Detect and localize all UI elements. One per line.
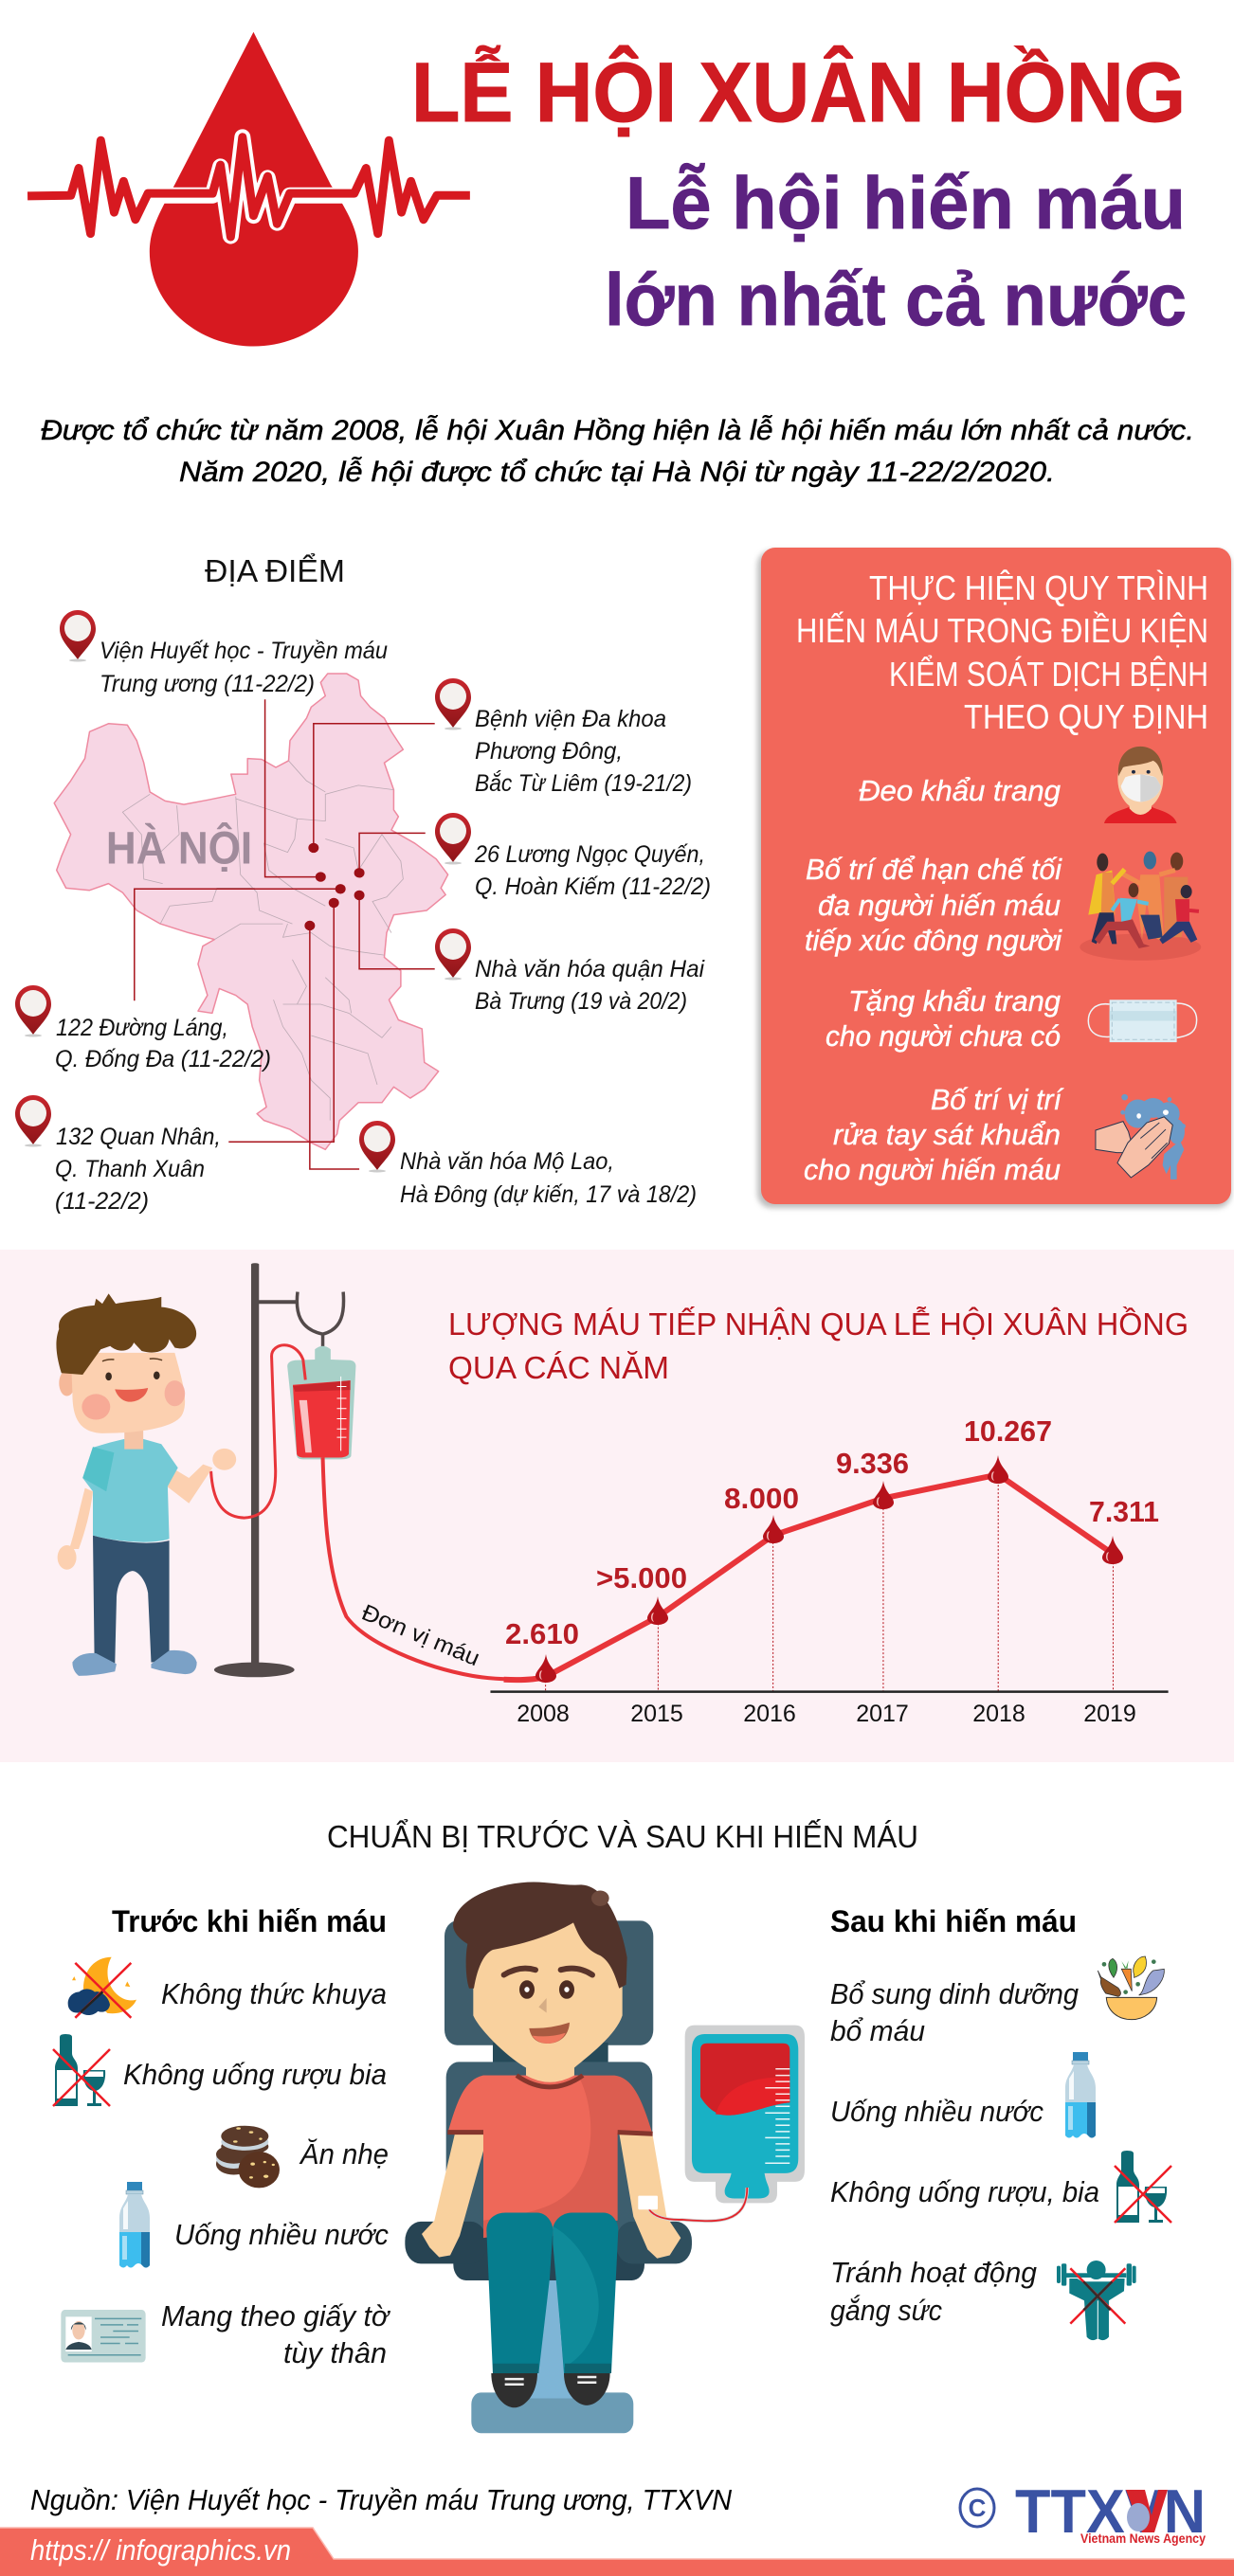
x axis years [517, 1701, 1136, 1727]
location labels: Nhà văn hóa Mộ Lao, [400, 1148, 614, 1175]
x axis years: 2015 [630, 1701, 683, 1727]
panel items: Tặng khẩu trang [848, 984, 1061, 1018]
panel items: Đeo khẩu trang [859, 774, 1061, 807]
icon: nutritious food bowl [1098, 1956, 1164, 2020]
location labels: Bắc Từ Liêm (19-21/2) [475, 769, 692, 797]
logo: TTXVN: TTXVN [1015, 2477, 1206, 2546]
title: LỄ HỘI XUÂN HỒNG [411, 45, 1186, 139]
location labels: Viện Huyết học - Truyền máu [100, 638, 388, 664]
title [411, 45, 1187, 341]
title: Lễ hội hiến máu [626, 161, 1186, 244]
data values: 8.000 [724, 1482, 799, 1515]
panel items: đa người hiến máu [818, 889, 1061, 922]
location labels: Trung ương (11-22/2) [100, 671, 315, 697]
location labels: Phương Đông, [475, 738, 623, 765]
x axis years: 2016 [743, 1701, 796, 1727]
before items [123, 1977, 390, 2369]
before items: tùy thân [283, 2336, 387, 2369]
blood drop markers [535, 1455, 1123, 1683]
chart title [448, 1306, 1189, 1385]
before items: Mang theo giấy tờ [161, 2299, 390, 2333]
panel heading [796, 568, 1208, 736]
map label: HÀ NỘI [106, 821, 252, 874]
intro text [41, 415, 1194, 488]
panel items: Bố trí vị trí [931, 1083, 1064, 1116]
map of Hanoi [54, 674, 448, 1169]
footer bar with website: https:// infographics.vn [30, 2533, 291, 2567]
location labels: Bệnh viện Đa khoa [475, 706, 666, 732]
unit label: Đơn vị máu [358, 1600, 483, 1671]
x axis years: 2008 [517, 1701, 570, 1727]
column: before donating [53, 1904, 390, 2369]
chart title: LƯỢNG MÁU TIẾP NHẬN QUA LỄ HỘI XUÂN HỒNG [448, 1306, 1189, 1342]
location labels: Hà Đông (dự kiến, 17 và 18/2) [400, 1181, 697, 1208]
section heading: preparation: CHUẨN BỊ TRƯỚC VÀ SAU KHI HIẾN MÁU [327, 1819, 918, 1854]
location labels: Bà Trưng (19 và 20/2) [475, 988, 687, 1015]
panel items [804, 774, 1064, 1186]
icon: water bottle [119, 2182, 150, 2268]
data values: >5.000 [596, 1561, 687, 1594]
data values: 10.267 [964, 1414, 1052, 1448]
column heading: Trước khi hiến máu [112, 1904, 387, 1938]
icon: washing hands [1096, 1094, 1186, 1180]
location labels [55, 638, 711, 1215]
panel: blood donation procedure [757, 548, 1231, 1208]
after items [830, 1977, 1099, 2327]
heading: địa điểm: ĐỊA ĐIỂM [205, 553, 345, 588]
logo: TTXVN: C [969, 2494, 987, 2522]
icon: surgical mask [1088, 1000, 1197, 1042]
after items: Tránh hoạt động [830, 2256, 1037, 2289]
x axis years: 2018 [972, 1701, 1025, 1727]
data values: 2.610 [505, 1617, 579, 1650]
line chart [323, 1458, 1169, 1692]
intro text: Năm 2020, lễ hội được tổ chức tại Hà Nội từ ngày 11-22/2/2020. [179, 457, 1055, 488]
panel items: cho người chưa có [826, 1019, 1061, 1053]
icon: ID card [61, 2310, 146, 2363]
column heading: Sau khi hiến máu [830, 1904, 1077, 1938]
logo: TTXVN: Vietnam News Agency [1080, 2531, 1206, 2546]
icon: water bottle [1065, 2052, 1096, 2137]
icon: no alcohol [53, 2034, 110, 2106]
illustration: boy donating at IV stand [56, 1263, 355, 1677]
icon: no alcohol [1115, 2151, 1171, 2223]
location labels: 132 Quan Nhân, [56, 1124, 221, 1150]
x axis years: 2017 [856, 1701, 909, 1727]
icon: cookies [216, 2126, 280, 2188]
icon: crowd of people [1080, 852, 1201, 961]
before items: Uống nhiều nước [174, 2218, 389, 2251]
icon: no heavy exercise [1057, 2261, 1136, 2340]
location labels: 26 Lương Ngọc Quyến, [474, 841, 705, 868]
data values: 9.336 [836, 1447, 909, 1480]
icon: no staying up late [68, 1957, 136, 2018]
after items: Không uống rượu, bia [830, 2175, 1099, 2208]
location labels: 122 Đường Láng, [56, 1015, 228, 1041]
before items: Ăn nhẹ [299, 2137, 389, 2171]
location labels: (11-22/2) [55, 1188, 149, 1215]
after items: Uống nhiều nước [830, 2095, 1043, 2128]
icon: blood drop with heartbeat [27, 32, 470, 346]
before items: Không thức khuya [161, 1977, 387, 2010]
intro text: Được tổ chức từ năm 2008, lễ hội Xuân Hồng hiện là lễ hội hiến máu lớn nhất cả nước. [41, 415, 1194, 446]
icon: person wearing mask [1104, 747, 1177, 823]
location pins [15, 610, 471, 1173]
x axis years: 2019 [1083, 1701, 1136, 1727]
before items: Không uống rượu bia [123, 2058, 387, 2091]
after items: gắng sức [830, 2294, 942, 2327]
location labels: Q. Hoàn Kiếm (11-22/2) [475, 874, 711, 900]
panel items: tiếp xúc đông người [805, 924, 1062, 957]
panel: blood collected per year [0, 1250, 1234, 1762]
location labels: Q. Đống Đa (11-22/2) [55, 1046, 271, 1072]
after items: Bổ sung dinh dưỡng [830, 1977, 1079, 2010]
panel items: cho người hiến máu [804, 1153, 1061, 1186]
title: lớn nhất cả nước [605, 258, 1187, 341]
illustration: man donating blood [405, 1882, 805, 2433]
chart title: QUA CÁC NĂM [448, 1350, 669, 1385]
panel items: Bố trí để hạn chế tối [806, 853, 1062, 886]
data values [505, 1414, 1159, 1650]
panel heading: THEO QUY ĐỊNH [964, 697, 1208, 736]
location labels: Nhà văn hóa quận Hai [475, 956, 705, 982]
footer bar with website [0, 2528, 1234, 2576]
after items: bổ máu [830, 2014, 925, 2047]
panel items: rửa tay sát khuẩn [833, 1118, 1061, 1151]
leader lines and location dots [135, 699, 435, 1169]
column: after donating [830, 1904, 1171, 2340]
location labels: Q. Thanh Xuân [55, 1156, 205, 1182]
source: Nguồn: Viện Huyết học - Truyền máu Trung ương, TTXVN [30, 2483, 733, 2516]
data values: 7.311 [1089, 1495, 1159, 1528]
